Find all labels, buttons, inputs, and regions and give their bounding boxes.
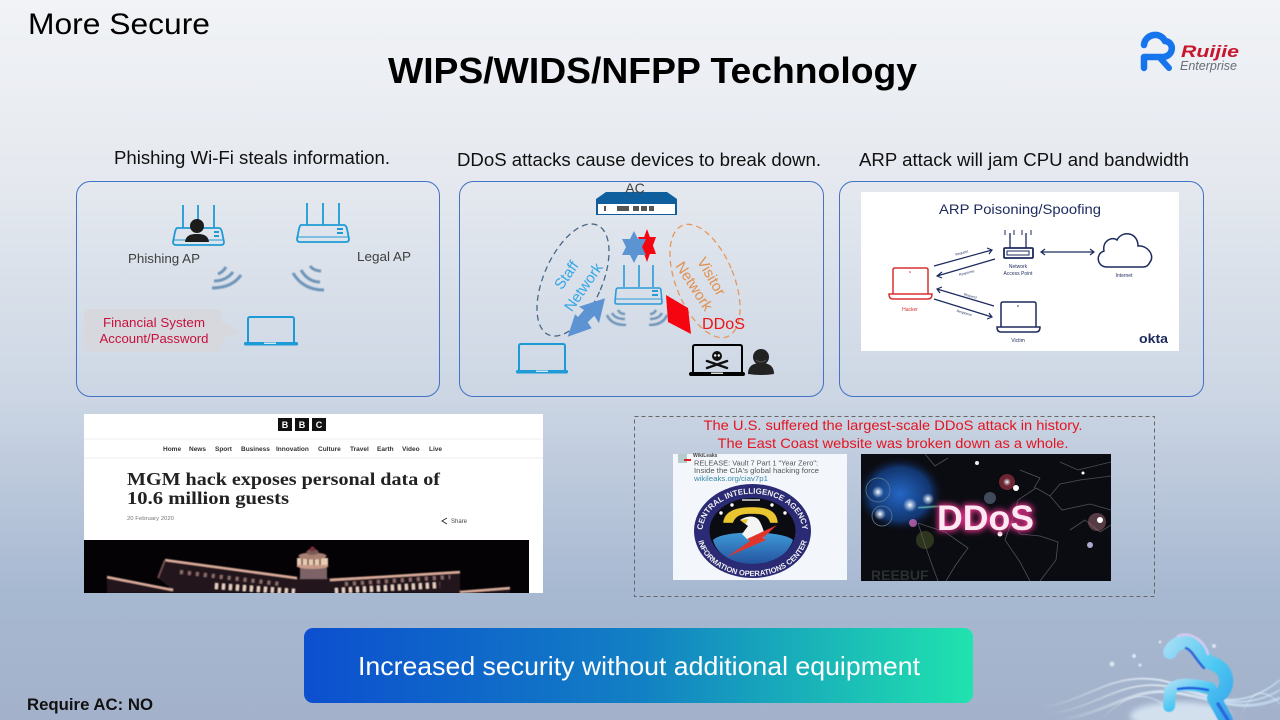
icon: victim laptop (997, 302, 1040, 344)
label: Visitor Network: Visitor (693, 255, 729, 299)
navigation bar: Travel (350, 446, 369, 453)
image: WikiLeaks tweet: wikileaks.org/ciav7p1 (693, 474, 768, 483)
icon: hacker (748, 349, 774, 375)
share link (442, 518, 468, 525)
callout: credentials (84, 309, 240, 352)
summary banner: Increased security without additional equipment (358, 651, 921, 681)
BBC logo: C (316, 420, 323, 430)
icon: central AP router (615, 265, 662, 304)
icon: blue star (622, 231, 646, 263)
BBC logo (278, 418, 326, 431)
red callout text: The U.S. suffered the largest-scale DDoS attack in history. (704, 417, 1082, 433)
visitor network ellipse (656, 215, 754, 347)
icon: access point (1004, 230, 1033, 277)
label: Phishing AP: Phishing AP (128, 252, 200, 266)
icon: wifi signal right (649, 310, 667, 325)
heading: phishing: Phishing Wi-Fi steals information. (114, 148, 390, 168)
icon: infected laptop with skull (689, 345, 745, 376)
BBC logo: B (282, 420, 289, 430)
okta wordmark: okta (1139, 331, 1169, 346)
arrows: ARP traffic: Request (963, 292, 977, 300)
label: AC: AC (625, 180, 645, 196)
icon: internet cloud: Internet (1116, 273, 1133, 279)
icon: access point: Network (1009, 264, 1028, 270)
navigation bar: Earth (377, 446, 394, 453)
callout: credentials: Account/Password (100, 332, 209, 346)
CIA seal (694, 484, 811, 578)
label: DDoS: DDoS (702, 316, 745, 333)
icon: hacker laptop: Hacker (902, 307, 918, 313)
navigation bar: Live (429, 446, 442, 453)
navigation bar (163, 446, 442, 453)
icon: user laptop (244, 317, 298, 346)
logo: Ruijie Enterprise (1144, 35, 1239, 73)
panel: DDoS attacks (460, 180, 824, 396)
DDoS glow wordmark: DDoS (937, 499, 1034, 538)
image: DDoS attack map: REEBUF (871, 567, 929, 583)
image: WikiLeaks tweet: Inside the CIA's global hacking force (694, 466, 819, 475)
icon: hacker laptop (889, 268, 932, 313)
icon: internet cloud (1098, 234, 1152, 279)
navigation bar: Sport (215, 446, 233, 453)
panel: phishing Wi-Fi (76, 182, 440, 396)
arrows: ARP traffic: Response (956, 309, 972, 317)
navigation bar: Innovation (276, 446, 309, 453)
logo: Ruijie Enterprise: Ruijie (1181, 42, 1239, 61)
label: Staff Network: Network (561, 260, 607, 315)
arrows: ARP traffic (934, 248, 1094, 319)
summary banner (304, 628, 973, 703)
label: Legal AP: Legal AP (357, 250, 411, 264)
arrow: DDoS attack link (666, 295, 691, 334)
navigation bar: Business (241, 446, 270, 453)
navigation bar: Culture (318, 446, 341, 453)
navigation bar: Video (402, 446, 420, 453)
CIA seal: CENTRAL INTELLIGENCE AGENCY (697, 488, 808, 530)
logo: Ruijie Enterprise: Enterprise (1180, 58, 1237, 73)
icon: victim laptop: Victim (1011, 338, 1025, 344)
ARP diagram image (861, 192, 1179, 351)
image: DDoS attack map (856, 454, 1111, 583)
photo: hotel at night (84, 540, 529, 593)
navigation bar: News (189, 446, 206, 453)
navigation bar: Home (163, 446, 181, 453)
date: 20 February 2020 (127, 516, 174, 522)
main title: WIPS/WIDS/NFPP Technology (388, 50, 917, 91)
footer note: Require AC: NO (27, 696, 153, 714)
icon: red star (638, 229, 656, 262)
arrows: ARP traffic: Response (959, 269, 975, 277)
red callout text (704, 417, 1082, 451)
news headline (127, 469, 441, 508)
icon: AC controller (596, 192, 677, 215)
arrows: ARP traffic: Request (955, 249, 969, 257)
dashed panel: DDoS news (634, 416, 1155, 597)
staff network ellipse (522, 213, 624, 347)
icon: access point: Access Point (1004, 271, 1033, 277)
panel: ARP attack (840, 182, 1204, 396)
slide section label: More Secure (28, 8, 210, 41)
image: WikiLeaks tweet (673, 453, 847, 580)
heading: DDoS: DDoS attacks cause devices to break down. (457, 150, 821, 170)
icon: wifi signal from legal AP (293, 266, 324, 290)
callout: credentials: Financial System (103, 316, 205, 330)
news headline: 10.6 million guests (127, 488, 289, 508)
heading: ARP: ARP attack will jam CPU and bandwidth (859, 150, 1189, 170)
icon: legal AP router (297, 203, 349, 242)
news screenshot: BBC MGM hack (84, 414, 543, 593)
DDoS glow wordmark: DDoS (937, 499, 1034, 538)
share link: Share (451, 519, 468, 525)
news headline: MGM hack exposes personal data of (127, 469, 441, 489)
label: Visitor Network: Network (672, 259, 716, 315)
icon: staff laptop (516, 344, 568, 374)
image: WikiLeaks tweet: RELEASE: Vault 7 Part 1 "Year Zero": (694, 458, 818, 468)
arrow: staff link (568, 298, 605, 337)
image: WikiLeaks tweet: WikiLeaks (693, 453, 718, 459)
label: Staff Network: Staff (551, 257, 583, 293)
icon: wifi signal left (607, 310, 626, 325)
diagram title: ARP Poisoning/Spoofing (939, 201, 1101, 217)
icon: wifi signal from phishing AP (212, 267, 241, 288)
BBC logo: B (299, 420, 306, 430)
CIA seal: INFORMATION OPERATIONS CENTER (698, 540, 807, 576)
decorative corner artwork: waves and 3D logo (1040, 635, 1280, 720)
red callout text: The East Coast website was broken down as a whole. (718, 435, 1068, 451)
icon: phishing AP router (173, 205, 224, 245)
